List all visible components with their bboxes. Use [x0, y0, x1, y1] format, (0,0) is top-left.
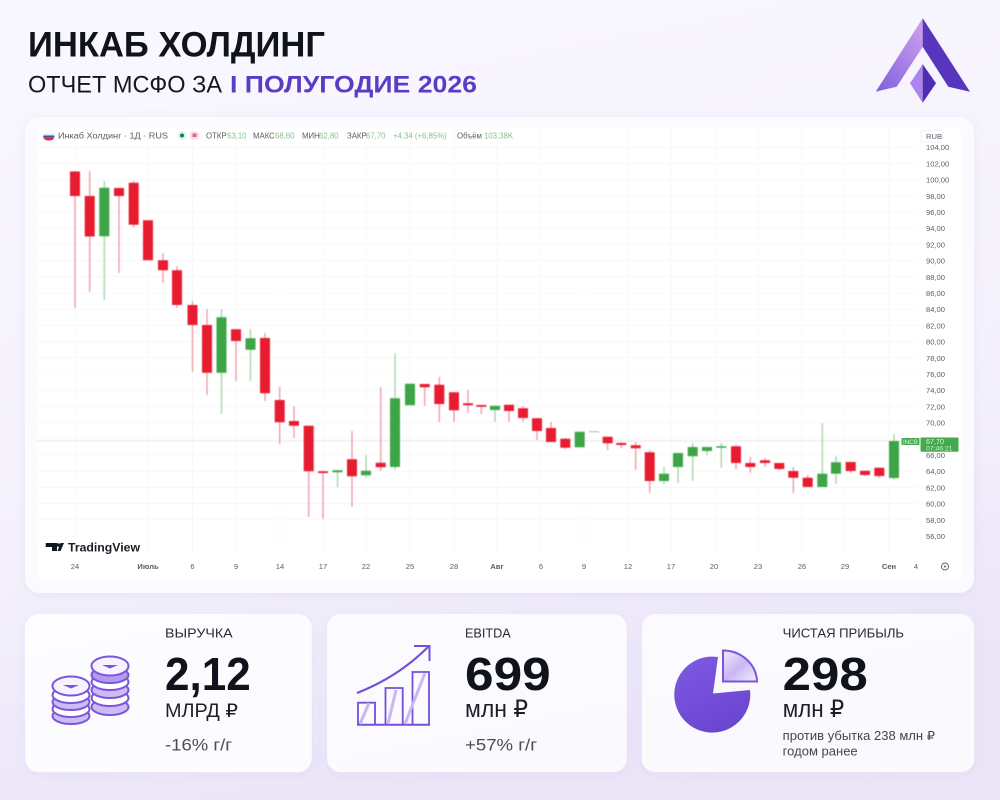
net profit text: 298 [783, 648, 868, 700]
time axis [71, 562, 948, 571]
current price line [37, 440, 901, 442]
price axis: 100,00 [926, 176, 949, 185]
price axis: 74,00 [926, 386, 945, 395]
time axis: Авг [490, 562, 504, 571]
price axis: 60,00 [926, 500, 945, 509]
current price tag: 07:46:21 [926, 446, 953, 452]
time axis: 9 [582, 562, 586, 571]
price axis: 80,00 [926, 338, 945, 347]
net profit text [783, 626, 935, 759]
icon: growth chart [357, 646, 430, 725]
legend bar: Объём [457, 132, 482, 140]
price axis: 66,00 [926, 451, 945, 460]
EBITDA text: EBITDA [465, 626, 511, 641]
time axis: 24 [71, 562, 79, 571]
chart grid [37, 128, 917, 555]
time axis: 17 [319, 562, 327, 571]
price axis: 56,00 [926, 532, 945, 541]
icon: pie chart [674, 650, 757, 733]
revenue text: 2,12 [165, 648, 251, 700]
legend bar: МАКС [253, 132, 275, 140]
revenue text: ВЫРУЧКА [165, 626, 233, 641]
time axis: 26 [798, 562, 806, 571]
red candle wicks [75, 171, 879, 519]
net profit text: млн ₽ [783, 696, 844, 723]
price axis: 98,00 [926, 192, 945, 201]
price axis: 62,00 [926, 483, 945, 492]
current price tag: INCB [903, 439, 918, 446]
legend bar: 62,80 [319, 132, 339, 140]
time axis: 4 [914, 562, 918, 571]
legend bar: +4,34 (+6,85%) [393, 132, 447, 140]
legend bar: Инкаб Холдинг · 1Д · RUS [58, 132, 168, 140]
legend bar: 63,10 [227, 132, 247, 140]
price axis: 88,00 [926, 273, 945, 282]
legend bar: 103,38K [484, 132, 514, 140]
green candle wicks [104, 181, 894, 487]
panel: revenue [25, 614, 312, 772]
current price tag: 67,70 [926, 437, 944, 446]
legend bar: 67,70 [366, 132, 386, 140]
legend bar: 68,60 [275, 132, 295, 140]
EBITDA text [465, 626, 551, 755]
price axis: 64,00 [926, 467, 945, 476]
TradingView logo: TradingView [68, 542, 140, 554]
net profit text: годом ранее [783, 745, 858, 759]
price axis: 102,00 [926, 159, 949, 168]
time axis: 23 [754, 562, 762, 571]
price axis: 104,00 [926, 143, 949, 152]
price axis: 72,00 [926, 402, 945, 411]
net profit text: против убытка 238 млн ₽ [783, 729, 935, 743]
candlesticks [75, 171, 894, 519]
legend bar: ОТКР [206, 132, 227, 140]
price axis: 96,00 [926, 208, 945, 217]
price axis: 86,00 [926, 289, 945, 298]
price axis: 84,00 [926, 305, 945, 314]
price axis: 92,00 [926, 240, 945, 249]
price axis: RUB [926, 132, 942, 141]
legend bar [43, 131, 514, 140]
price axis: 90,00 [926, 257, 945, 266]
time axis: Июль [137, 562, 159, 571]
subtitle [28, 71, 477, 98]
EBITDA text: +57% г/г [465, 737, 537, 755]
time axis: 14 [276, 562, 284, 571]
time axis: 29 [841, 562, 849, 571]
icon: company logo [876, 18, 970, 103]
icon: coin stacks [52, 656, 128, 724]
price axis: 70,00 [926, 419, 945, 428]
net profit text: ЧИСТАЯ ПРИБЫЛЬ [783, 626, 904, 641]
EBITDA text: млн ₽ [465, 696, 528, 723]
time axis: Сен [882, 562, 897, 571]
price axis: 58,00 [926, 516, 945, 525]
EBITDA text: 699 [465, 648, 551, 700]
panel: net profit [642, 614, 974, 772]
subtitle: I ПОЛУГОДИЕ 2026 [230, 71, 477, 98]
current price tag [902, 437, 958, 452]
time axis: 6 [539, 562, 543, 571]
red candle bodies [75, 172, 879, 487]
price axis: 94,00 [926, 224, 945, 233]
revenue text [165, 626, 251, 755]
time axis: 9 [234, 562, 238, 571]
subtitle: ОТЧЕТ МСФО ЗА [28, 71, 222, 98]
green candle bodies [104, 188, 894, 487]
revenue text: -16% г/г [165, 737, 232, 755]
panel: EBITDA [327, 614, 627, 772]
time axis: 25 [406, 562, 414, 571]
time axis: 22 [362, 562, 370, 571]
legend bar: МИН [302, 132, 320, 140]
time axis: 12 [624, 562, 632, 571]
time axis: 17 [667, 562, 675, 571]
legend bar: ЗАКР [347, 132, 367, 140]
price axis: 78,00 [926, 354, 945, 363]
price axis: 82,00 [926, 321, 945, 330]
time axis: 28 [450, 562, 458, 571]
price axis: 76,00 [926, 370, 945, 379]
title: ИНКАБ ХОЛДИНГ [28, 26, 325, 65]
revenue text: МЛРД ₽ [165, 701, 238, 722]
time axis: 20 [710, 562, 718, 571]
price axis [921, 130, 949, 541]
icon: flag [43, 134, 54, 140]
panel: price chart [25, 117, 974, 593]
time axis: 6 [190, 562, 195, 571]
